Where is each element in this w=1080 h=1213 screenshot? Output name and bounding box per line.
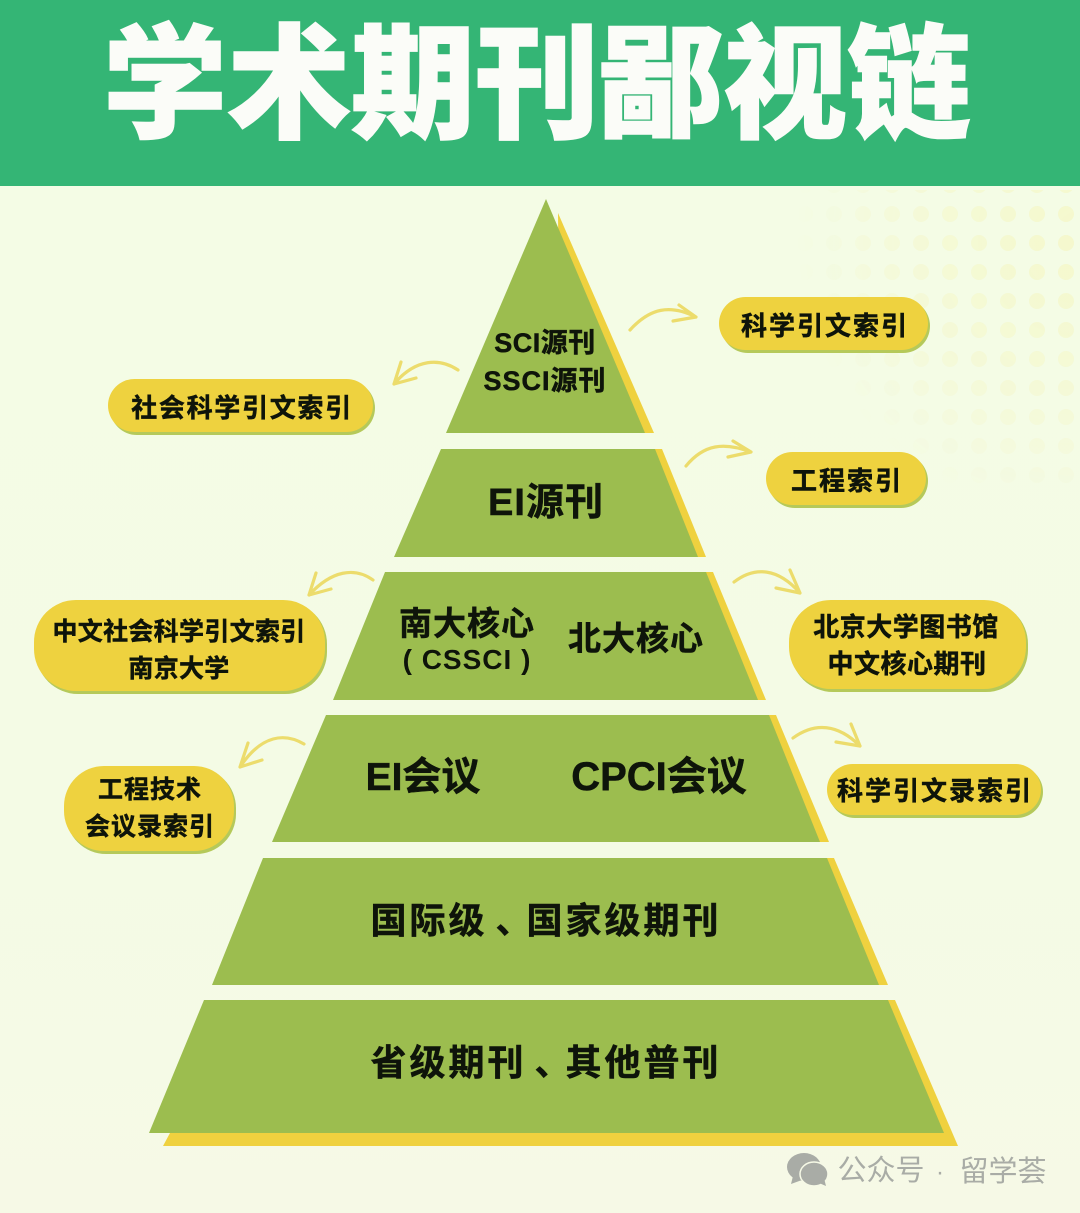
tier 5: international and national journals: 国际级、国家级期刊 — [370, 900, 722, 941]
tier 4: EI and CPCI conferences: CPCI会议 — [571, 755, 747, 799]
callout: science citation index: 科学引文索引 — [741, 311, 909, 341]
tier 6: provincial and other journals — [149, 1000, 958, 1146]
tier 2: EI source journals: EI源刊 — [488, 482, 604, 524]
callout: science citation proceedings index: 科学引文录索引 — [837, 776, 1033, 806]
tier 4: EI and CPCI conferences — [272, 715, 829, 842]
tier 1: SCI and SSCI source journals: SCI源刊 — [494, 328, 596, 358]
tier 4: EI and CPCI conferences: EI会议 — [366, 756, 480, 799]
callout: social science citation index — [108, 379, 375, 435]
callout: Peking University library core journals — [789, 600, 1028, 692]
title: 学术期刊鄙视链 — [103, 17, 971, 155]
tier 3: CSSCI and PKU core — [333, 572, 766, 700]
tier 3: CSSCI and PKU core: 北大核心 — [568, 620, 704, 657]
callout: Chinese social science citation index: 南京大学 — [128, 655, 230, 683]
arrow: CPCI conferences to proceedings index — [793, 724, 860, 746]
callout: engineering conference proceedings index — [64, 766, 236, 854]
tier 2: EI source journals — [394, 449, 706, 557]
arrow: CSSCI to Chinese social science citation index — [309, 572, 373, 595]
watermark: · — [936, 1159, 944, 1186]
callout: engineering conference proceedings index: 工程技术 — [98, 776, 202, 804]
callout: Chinese social science citation index: 中文社会科学引文索引 — [52, 618, 306, 646]
callout: science citation index — [719, 297, 930, 353]
callout: science citation proceedings index — [827, 764, 1043, 818]
watermark — [787, 1153, 1047, 1188]
callout: engineering index: 工程索引 — [791, 466, 903, 496]
icon: chat bubbles — [787, 1153, 828, 1186]
arrow: EI conferences to proceedings index — [240, 738, 304, 767]
callout: Chinese social science citation index — [34, 600, 327, 694]
tier 3: CSSCI and PKU core: 南大核心 — [399, 605, 535, 642]
tier 6: provincial and other journals: 省级期刊、其他普刊 — [370, 1042, 722, 1083]
watermark: 留学荟 — [959, 1155, 1047, 1188]
tier 1: SCI and SSCI source journals: SSCI源刊 — [483, 366, 607, 396]
header banner — [0, 0, 1080, 186]
callout: Peking University library core journals: 北京大学图书馆 — [813, 612, 999, 642]
arrow: SCI to science citation index — [630, 305, 696, 330]
watermark: 公众号 — [837, 1155, 925, 1187]
callout: social science citation index: 社会科学引文索引 — [131, 393, 353, 423]
tier 3: CSSCI and PKU core: ( CSSCI ) — [403, 644, 531, 675]
arrow: SSCI to social science citation index — [394, 362, 458, 384]
callout: Peking University library core journals: 中文核心期刊 — [827, 649, 987, 679]
tier 1: SCI and SSCI source journals — [446, 199, 654, 433]
pyramid — [149, 199, 958, 1146]
arrow: EI journals to engineering index — [686, 441, 751, 466]
arrow: PKU core to library core journals — [734, 570, 800, 593]
callout: engineering index — [766, 452, 928, 508]
callout: engineering conference proceedings index: 会议录索引 — [85, 813, 215, 841]
tier 5: international and national journals — [212, 858, 888, 985]
